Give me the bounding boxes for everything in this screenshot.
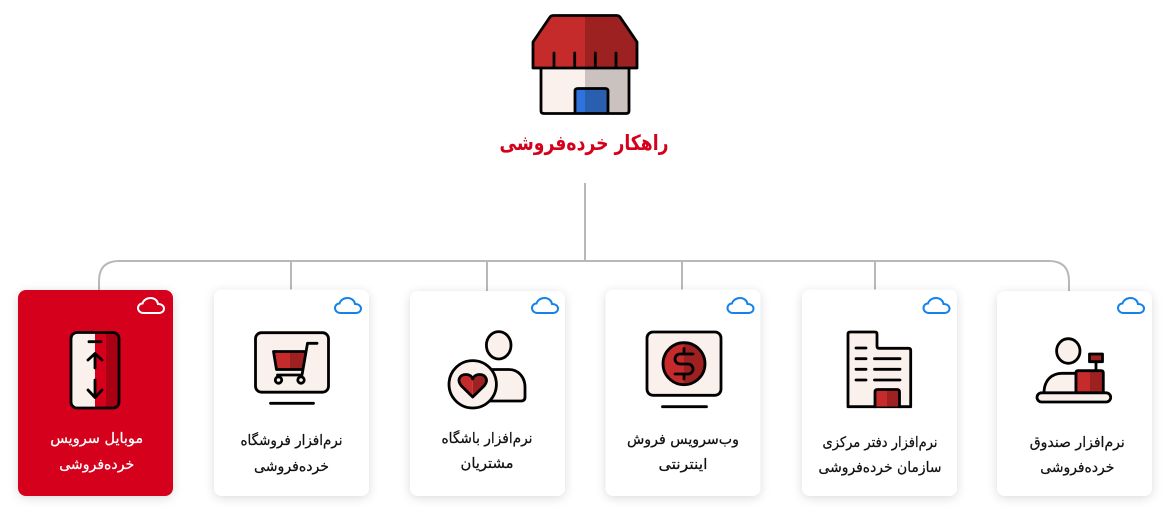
- label: [1030, 435, 1125, 476]
- label: سازمان خرده‌فروشی: [818, 460, 942, 476]
- label: [240, 432, 342, 475]
- label: خرده‌فروشی: [1040, 460, 1114, 476]
- icon: cloud: [728, 298, 754, 313]
- icon: office building: [848, 332, 911, 407]
- label: نرم‌افزار فروشگاه: [240, 432, 342, 449]
- label: [627, 432, 739, 473]
- label: وب‌سرویس فروش: [627, 432, 739, 448]
- icon: cloud: [532, 298, 558, 313]
- label: خرده‌فروشی: [254, 459, 329, 475]
- connector lines: [99, 183, 1069, 291]
- label: مشتریان: [460, 456, 514, 472]
- icon: cloud: [924, 298, 950, 313]
- label: اینترنتی: [658, 457, 708, 473]
- panel: customer club: [410, 291, 565, 496]
- panel: point of sale software: [997, 291, 1152, 496]
- panel: store software: [214, 290, 369, 496]
- label: موبایل سرویس: [50, 431, 143, 447]
- panel: head office software: [802, 290, 957, 496]
- icon: cashier: [1037, 339, 1111, 402]
- label: نرم‌افزار صندوق: [1030, 435, 1125, 451]
- label: نرم‌افزار دفتر مرکزی: [822, 435, 938, 451]
- label: نرم‌افزار باشگاه: [442, 430, 532, 447]
- title: راهکار خرده‌فروشی: [500, 131, 668, 155]
- panel: online sales web service: [606, 290, 760, 496]
- icon: customer with heart: [449, 332, 525, 408]
- icon: cloud: [335, 298, 361, 313]
- label: خرده‌فروشی: [59, 457, 134, 473]
- label: [50, 431, 143, 473]
- icon: cloud: [1118, 298, 1144, 313]
- panel: mobile service: [18, 290, 173, 496]
- icon: store: [533, 16, 637, 114]
- icon: mobile with arrows: [71, 332, 119, 408]
- icon: cloud: [138, 298, 164, 313]
- label: [442, 430, 532, 472]
- icon: monitor with cart: [256, 333, 328, 403]
- label: [818, 435, 942, 476]
- icon: monitor with dollar: [647, 332, 721, 407]
